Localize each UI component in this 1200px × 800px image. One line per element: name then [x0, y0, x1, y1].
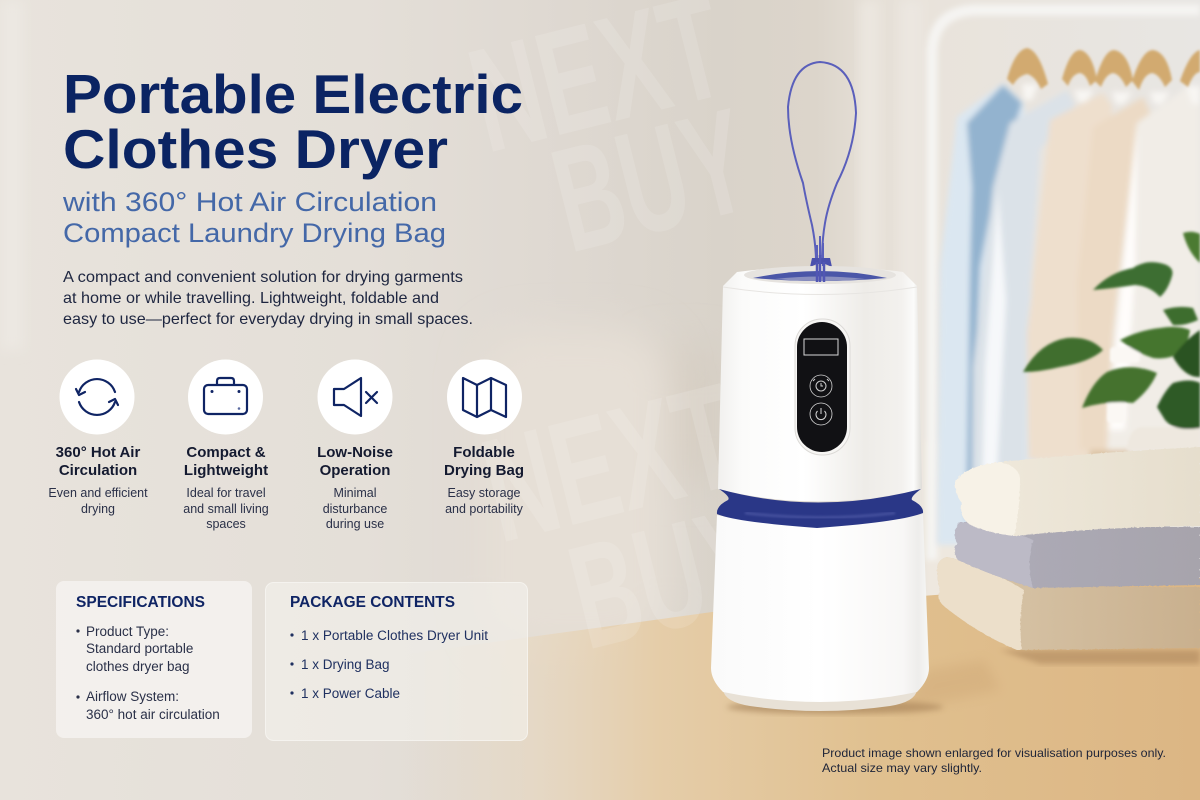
towel: grey [955, 522, 1200, 588]
panel: specifications: SPECIFICATIONS [76, 594, 205, 611]
disclaimer: Product image shown enlarged for visualisation purposes only. [822, 746, 1166, 760]
title: Clothes Dryer [63, 118, 448, 180]
feature: 360 hot air circulation: 360° Hot Air [56, 444, 140, 461]
towel: tan [937, 557, 1200, 650]
feature: 360 hot air circulation [48, 360, 148, 516]
title: Portable Electric [63, 63, 523, 125]
towel stack [937, 447, 1200, 664]
feature: compact and lightweight: Ideal for travel [186, 486, 266, 500]
feature: compact and lightweight [183, 360, 269, 531]
panel: package contents: 1 x Drying Bag [301, 657, 390, 672]
feature: compact and lightweight: spaces [206, 517, 246, 531]
dryer lower body [711, 514, 929, 702]
watermark: BUY [555, 475, 781, 681]
icon: suitcase [204, 378, 247, 414]
feature: foldable drying bag [444, 360, 524, 516]
towel: cream [955, 447, 1200, 536]
icon: circular arrows [76, 379, 118, 415]
description: A compact and convenient solution for drying garments [63, 269, 463, 286]
feature: low-noise operation: Low-Noise [317, 444, 393, 461]
panel: specifications: Airflow System: [86, 689, 179, 704]
dryer handle loop [788, 62, 856, 280]
icon: muted speaker [334, 378, 377, 416]
feature: low-noise operation: Minimal [333, 486, 377, 500]
panel: package contents: PACKAGE CONTENTS [290, 594, 455, 611]
title [63, 63, 523, 180]
description [63, 269, 473, 328]
background: hanging garments [937, 83, 1200, 545]
subtitle: with 360° Hot Air Circulation [62, 187, 437, 217]
disclaimer: Actual size may vary slightly. [822, 761, 982, 775]
subtitle: Compact Laundry Drying Bag [63, 218, 446, 248]
feature: foldable drying bag: Foldable [453, 444, 515, 461]
feature: 360 hot air circulation: Circulation [59, 462, 137, 479]
feature: 360 hot air circulation: drying [81, 502, 115, 516]
panel: package contents: 1 x Power Cable [301, 686, 400, 701]
watermark: BUY [538, 78, 764, 284]
power button [810, 403, 832, 425]
feature: foldable drying bag: Easy storage [448, 486, 521, 500]
feature: foldable drying bag: and portability [445, 502, 524, 516]
dryer [711, 62, 929, 711]
background: clothes rack [932, 10, 1200, 560]
control panel [795, 319, 850, 455]
feature: low-noise operation: Operation [320, 462, 390, 479]
feature: compact and lightweight: and small living [183, 502, 269, 516]
watermark: NEXT [468, 353, 753, 574]
alarm button [810, 375, 832, 397]
panel: package contents: 1 x Portable Clothes Dryer Unit [301, 628, 488, 643]
background: wooden hangers [1007, 48, 1200, 90]
feature: low-noise operation: disturbance [323, 502, 387, 516]
feature: compact and lightweight: Compact & [186, 444, 266, 461]
description: at home or while travelling. Lightweight, foldable and [63, 290, 439, 307]
panel: specifications: Standard portable [86, 641, 193, 656]
panel: package contents [266, 582, 528, 740]
feature: low-noise operation [317, 360, 393, 531]
subtitle [62, 187, 446, 248]
icon: folded map [463, 378, 506, 417]
panel: specifications: clothes dryer bag [86, 659, 190, 674]
feature: 360 hot air circulation: Even and efficient [48, 486, 148, 500]
feature: foldable drying bag: Drying Bag [444, 462, 524, 479]
table top [400, 578, 1200, 800]
dryer shadow on table [727, 660, 1000, 714]
panel: specifications: 360° hot air circulation [86, 707, 220, 722]
feature: low-noise operation: during use [326, 517, 384, 531]
dryer base [723, 690, 917, 711]
background: plant [1023, 232, 1200, 450]
dryer upper body [718, 255, 922, 502]
panel: specifications [56, 581, 252, 738]
description: easy to use—perfect for everyday drying in small spaces. [63, 311, 473, 328]
panel: specifications: Product Type: [86, 624, 169, 639]
feature: compact and lightweight: Lightweight [184, 462, 268, 479]
disclaimer [822, 746, 1166, 775]
dryer blue ring [717, 489, 923, 528]
watermark [455, 0, 781, 681]
